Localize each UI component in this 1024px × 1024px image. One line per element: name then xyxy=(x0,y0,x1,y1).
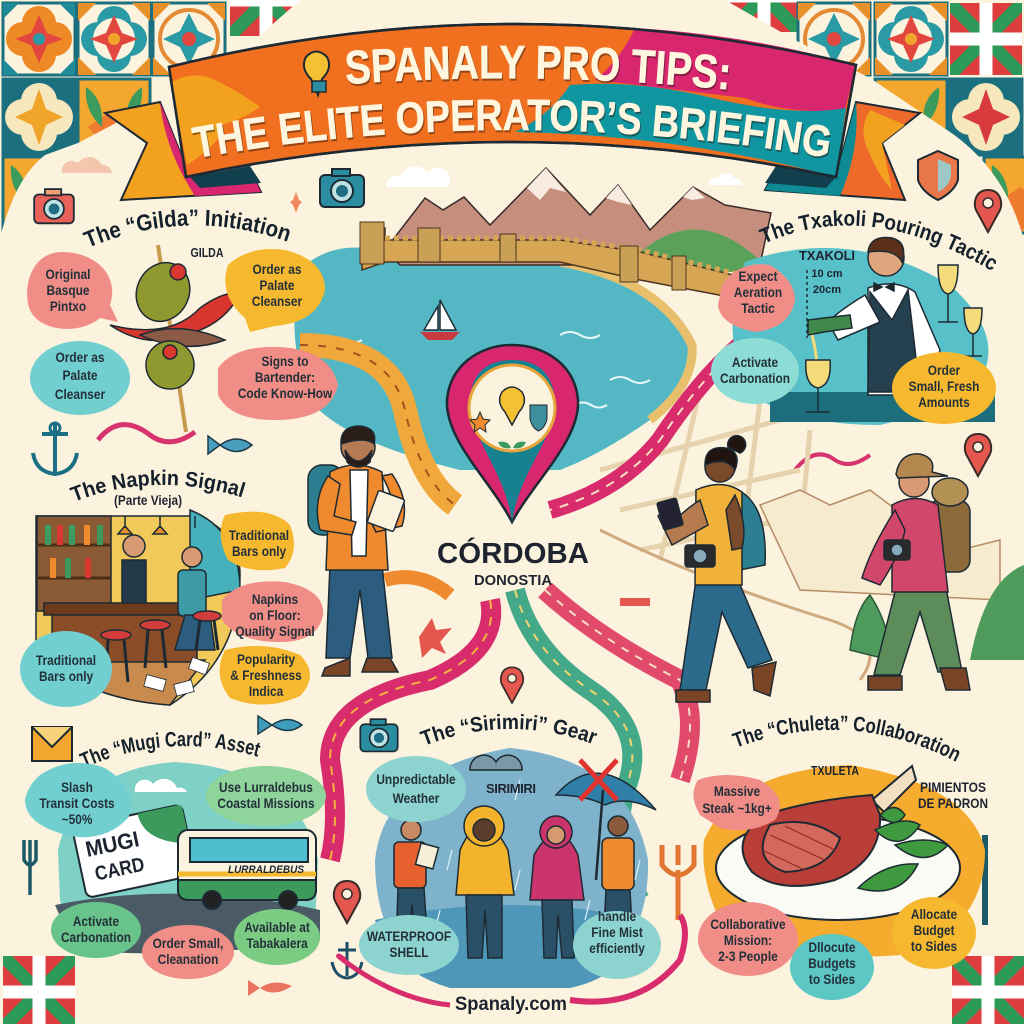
callout: Allocate Budget to Sides: to Sides xyxy=(911,938,957,954)
callout: Popularity & Freshness: & Freshness xyxy=(230,667,302,683)
label: Pimientos de padron: PIMIENTOS xyxy=(920,779,986,795)
callout: Massive Steak: Massive xyxy=(714,783,760,799)
banner right tail xyxy=(765,102,920,200)
callout: Handle fine mist: efficiently xyxy=(589,940,646,956)
callout: Activate Carbonation xyxy=(711,338,799,404)
panel: Mugi card xyxy=(25,731,326,979)
heading: Mugi card: The “Mugi Card” Asset xyxy=(78,731,260,764)
callout: Order as Palate Cleanser right: Cleanser xyxy=(252,293,302,309)
illustration: Mugi card: MUGI xyxy=(83,826,141,862)
callout: Traditional Bars only: Traditional xyxy=(229,527,289,543)
decorative shield xyxy=(918,151,958,200)
callout: Order as Palate Cleanser left: Order as xyxy=(56,349,104,365)
icon: crossed umbrella xyxy=(556,760,656,880)
callout: Available at Tabakalera: Available at xyxy=(244,919,311,935)
title text: SPANALY PRO TIPS: xyxy=(346,46,730,92)
callout: Collaborative Mission: 2-3 People xyxy=(718,948,778,964)
icon: cloud xyxy=(135,779,187,792)
callout: Signs to Bartender: Bartender: xyxy=(255,369,315,385)
callout: Activate Carbonation: Activate xyxy=(732,354,778,370)
callout: Napkins on Floor: Quality Signal xyxy=(235,623,315,639)
callout: Order Small, Cleanation: Cleanation xyxy=(158,951,218,967)
callout: Napkins on Floor: Napkins xyxy=(252,591,298,607)
callout: Expect Aeration Tactic: Tactic xyxy=(741,300,775,316)
callout: Signs to Bartender: Signs to xyxy=(262,353,309,369)
title text: THE ELITE OPERATOR’S BRIEFING xyxy=(191,99,831,159)
illustration: Mugi card: CARD xyxy=(93,854,146,886)
illustration: steak xyxy=(743,766,916,886)
banner body xyxy=(169,24,856,177)
callout: Handle fine mist: handle xyxy=(598,908,636,924)
place label: Córdoba Donostia xyxy=(437,536,589,589)
callout: Allocate Budgets to Sides xyxy=(790,934,874,1000)
callout: Slash Transit Costs: Slash xyxy=(61,779,93,795)
title banner xyxy=(102,22,922,202)
heading: Sirimiri: The “Sirimiri” Gear xyxy=(419,714,598,744)
callout: Activate Carbonation: Carbonation xyxy=(61,929,131,945)
callout: Collaborative Mission: Mission: xyxy=(724,932,772,948)
heading: Gilda: The “Gilda” Initiation xyxy=(82,210,290,246)
figure: orange jacket xyxy=(602,816,634,928)
callout: Expect Aeration Tactic: Expect xyxy=(739,268,778,284)
place label: Córdoba Donostia: DONOSTIA xyxy=(474,572,552,589)
callout: Use Lurraldebus: Coastal Missions xyxy=(217,795,315,811)
callout: Allocate Budget to Sides xyxy=(892,897,976,969)
callout: Massive Steak xyxy=(693,775,780,830)
callout: Waterproof shell: SHELL xyxy=(390,944,429,960)
callout: Signs to Bartender xyxy=(218,347,338,420)
callout: Order as Palate Cleanser right: Palate xyxy=(259,277,295,293)
figure: yellow raincoat xyxy=(456,806,514,958)
callout: Unpredictable Weather xyxy=(366,756,466,822)
illustration: Lurraldebus bus: LURRALDEBUS xyxy=(228,864,305,876)
illustration: Lurraldebus bus xyxy=(178,830,316,909)
callout: Traditional Bars only left: Bars only xyxy=(39,668,94,684)
callout: Use Lurraldebus: Use Lurraldebus xyxy=(219,779,313,795)
illustration: teal blob xyxy=(732,248,988,425)
callout: Allocate Budgets to Sides: to Sides xyxy=(809,971,855,987)
panel: Txakoli pouring tactic xyxy=(711,210,996,425)
title text xyxy=(191,46,831,159)
label: Height measure: 20cm xyxy=(813,284,841,296)
callout: Collaborative Mission: Collaborative xyxy=(710,916,786,932)
illustration: plate xyxy=(716,816,960,920)
heading: Chuleta: The “Chuleta” Collaboration xyxy=(731,715,960,762)
callout: Original Basque Pintxo: Original xyxy=(46,266,90,282)
callout: Popularity & Freshness: Popularity xyxy=(237,651,296,667)
callout: Napkins on Floor xyxy=(222,581,323,642)
figure: hiker with big backpack xyxy=(862,454,970,690)
callout: Allocate Budget to Sides: Budget xyxy=(914,922,955,938)
callout: Order as Palate Cleanser left: Palate xyxy=(62,367,98,383)
callout: Traditional Bars only left xyxy=(20,631,112,707)
panel: Napkin signal xyxy=(20,470,324,707)
callout: Original Basque Pintxo: Pintxo xyxy=(50,298,86,314)
callout: Slash Transit Costs xyxy=(25,763,131,837)
central map pin xyxy=(447,345,578,522)
winding coloured roads xyxy=(300,345,740,1005)
callout: Order as Palate Cleanser left xyxy=(30,341,130,415)
callout: Traditional Bars only: Bars only xyxy=(232,543,287,559)
callout: Activate Carbonation: Carbonation xyxy=(720,370,790,386)
callout: Order as Palate Cleanser right xyxy=(225,249,325,332)
label: Height measure: 10 cm xyxy=(811,268,843,280)
icon: gilda pintxo skewer xyxy=(110,245,240,432)
callout: Order Small, Fresh Amounts: Amounts xyxy=(918,394,970,410)
label: Txakoli: TXAKOLI xyxy=(799,248,855,263)
callout: Expect Aeration Tactic xyxy=(718,264,795,332)
callout: Unpredictable Weather: Weather xyxy=(393,790,439,806)
panel: Gilda initiation xyxy=(27,210,338,432)
illustration: rainy scene xyxy=(375,748,656,988)
illustration: orange blob xyxy=(703,765,985,957)
callout: Activate Carbonation: Activate xyxy=(73,913,119,929)
illustration: padron peppers xyxy=(858,808,948,891)
figure: woman with phone and camera xyxy=(657,436,776,702)
figure: man with tablet xyxy=(394,820,439,950)
callout: Original Basque Pintxo xyxy=(27,252,118,329)
callout: Activate Carbonation xyxy=(51,902,141,958)
illustration: blob background with road xyxy=(58,762,318,951)
figure: pink raincoat xyxy=(530,816,584,958)
icon: wine glasses xyxy=(806,265,982,412)
callout: Popularity & Freshness: Indica xyxy=(249,683,284,699)
label: Pimientos de padron xyxy=(918,779,988,811)
callout: Collaborative Mission xyxy=(698,902,798,976)
callout: Popularity & Freshness xyxy=(220,646,310,705)
small decorative icons: clouds, cameras, pins, anchors, fish xyxy=(24,157,1001,996)
bottom flags xyxy=(3,956,1024,1024)
callout: Order as Palate Cleanser left: Cleanser xyxy=(55,386,105,402)
illustration: mountains and fortress xyxy=(360,168,771,300)
place label: Córdoba Donostia: CÓRDOBA xyxy=(437,536,589,570)
illustration: Mugi card xyxy=(72,804,196,898)
lightbulb icon xyxy=(304,52,329,95)
banner left tail xyxy=(105,102,261,200)
callout: Available at Tabakalera: Tabakalera xyxy=(246,935,308,951)
callout: Order Small, Cleanation xyxy=(142,925,234,979)
label: Gilda: GILDA xyxy=(190,245,224,260)
label: Pimientos de padron: DE PADRON xyxy=(918,795,988,811)
callout: Waterproof shell xyxy=(359,915,459,975)
heading: Napkin signal: The Napkin Signal xyxy=(69,470,246,500)
callout: Order as Palate Cleanser right: Order as xyxy=(253,261,301,277)
callout: Traditional Bars only xyxy=(221,512,294,570)
callout: Slash Transit Costs: ~50% xyxy=(62,811,93,827)
illustration: city map streets xyxy=(600,390,1000,680)
callout: Allocate Budgets to Sides: Budgets xyxy=(808,955,856,971)
callout: Allocate Budgets to Sides: Dllocute xyxy=(809,939,855,955)
label: Txuleta: TXULETA xyxy=(811,763,859,778)
illustration: bay with sailboat xyxy=(294,248,692,470)
callout: Expect Aeration Tactic: Aeration xyxy=(734,284,782,300)
callout: Unpredictable Weather: Unpredictable xyxy=(376,771,456,787)
panel: Chuleta collaboration xyxy=(693,715,988,1000)
callout: Available at Tabakalera xyxy=(234,909,320,965)
callout: Handle fine mist xyxy=(573,908,661,979)
heading: Txakoli: The Txakoli Pouring Tactic xyxy=(758,210,996,270)
callout: Handle fine mist: Fine Mist xyxy=(591,924,643,940)
callout: Order Small, Fresh Amounts: Small, Fresh xyxy=(909,378,979,394)
panel: Sirimiri gear xyxy=(359,714,661,988)
callout: Massive Steak: Steak ~1kg+ xyxy=(702,800,772,816)
label: Sirimiri: SIRIMIRI xyxy=(486,781,536,796)
callout: Waterproof shell: WATERPROOF xyxy=(367,928,451,944)
figure: waiter pouring xyxy=(770,238,995,422)
callout: Napkins on Floor: on Floor: xyxy=(249,607,301,623)
figure: traveller with notebook xyxy=(308,426,405,676)
callout: Order Small, Fresh Amounts xyxy=(892,352,996,424)
footer: Spanaly.com xyxy=(455,994,567,1015)
callout: Allocate Budget to Sides: Allocate xyxy=(911,906,957,922)
callout: Slash Transit Costs: Transit Costs xyxy=(39,795,115,811)
subheading: Parte Vieja: (Parte Vieja) xyxy=(114,492,182,508)
callout: Signs to Bartender: Code Know-How xyxy=(238,385,333,401)
label: Height measure xyxy=(807,268,843,338)
callout: Order Small, Cleanation: Order Small, xyxy=(153,935,223,951)
callout: Traditional Bars only left: Traditional xyxy=(36,652,96,668)
callout: Order Small, Fresh Amounts: Order xyxy=(928,362,960,378)
illustration: distant fort and trees xyxy=(620,565,1024,660)
callout: Original Basque Pintxo: Basque xyxy=(47,282,89,298)
callout: Use Lurraldebus xyxy=(206,766,326,826)
illustration: bar scene xyxy=(36,510,240,705)
